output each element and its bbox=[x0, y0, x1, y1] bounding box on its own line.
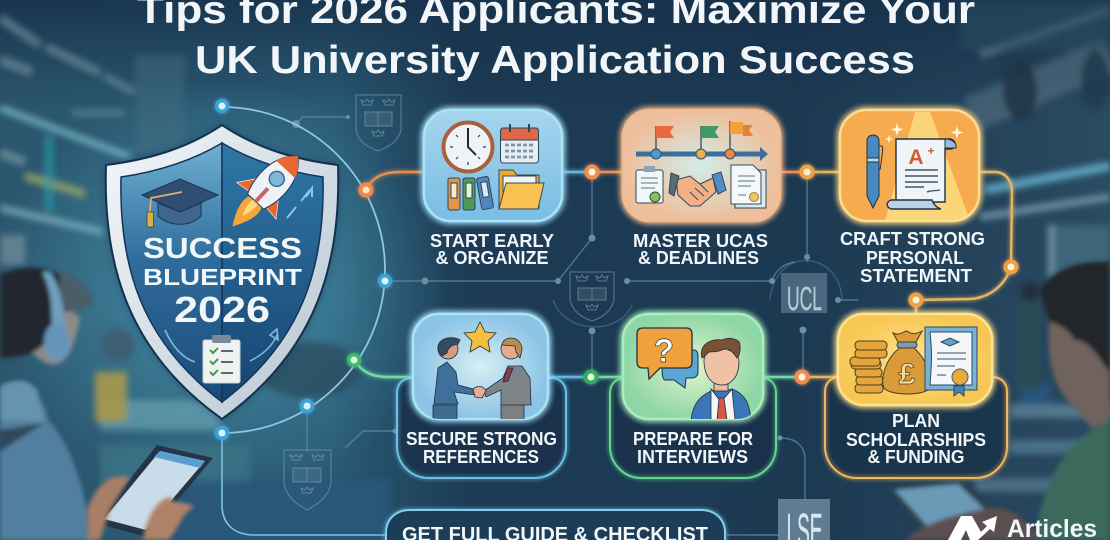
label bbox=[406, 429, 557, 467]
icon: handshake bbox=[669, 172, 726, 206]
label: SECURE STRONG bbox=[406, 429, 557, 449]
icon: graduation cap bbox=[142, 179, 218, 227]
icon: certificate document bbox=[731, 165, 766, 208]
node: orange bbox=[358, 182, 374, 198]
icon: pound money bag: £ bbox=[899, 358, 916, 391]
frame bbox=[397, 378, 566, 478]
panel: plan scholarships and funding bbox=[825, 314, 1007, 478]
icon: folder bbox=[499, 170, 544, 209]
label bbox=[633, 429, 753, 467]
label bbox=[840, 229, 985, 286]
icon: calendar bbox=[500, 124, 538, 163]
label: INTERVIEWS bbox=[637, 447, 748, 467]
card bbox=[623, 110, 780, 221]
icon: shield decorative arcs bbox=[165, 329, 278, 362]
logo: UCL: UCL bbox=[787, 280, 822, 317]
icon: scholarship certificate bbox=[925, 327, 977, 396]
card bbox=[838, 314, 992, 405]
icon: scroll with A+: A bbox=[908, 146, 924, 169]
panel: start early and organize bbox=[424, 110, 562, 268]
student left with tablet bbox=[0, 267, 213, 540]
icon: pound money bag bbox=[883, 331, 931, 394]
blueprint arc and node connector bbox=[222, 107, 385, 535]
icon: coin stack bbox=[850, 341, 887, 393]
card bbox=[413, 314, 548, 419]
crest: bottom bbox=[284, 450, 331, 510]
panel: master UCAS and deadlines bbox=[623, 110, 780, 268]
logo: LSE bbox=[778, 499, 830, 540]
frame bbox=[825, 377, 1007, 478]
icon: two men shaking hands under a star bbox=[433, 322, 531, 422]
icon: clipboard bbox=[636, 166, 663, 203]
panel: secure strong references bbox=[397, 314, 566, 478]
node: green bbox=[347, 353, 361, 367]
icon: clock bbox=[444, 122, 492, 172]
title: UK University Application Success bbox=[195, 39, 915, 82]
shield: Success Blueprint 2026 bbox=[106, 125, 338, 419]
label: STATEMENT bbox=[860, 266, 972, 286]
label: REFERENCES bbox=[423, 447, 539, 467]
icon: rocket bbox=[213, 138, 318, 245]
label bbox=[846, 411, 986, 467]
icon: interview candidate bbox=[691, 338, 751, 422]
label: PLAN bbox=[892, 411, 940, 431]
label: & ORGANIZE bbox=[436, 248, 548, 268]
node: blue lower bbox=[300, 399, 314, 413]
label: PREPARE FOR bbox=[633, 429, 753, 449]
label: START EARLY bbox=[430, 231, 554, 251]
icon: scroll with A+ bbox=[887, 139, 956, 209]
icon: binders bbox=[448, 176, 494, 210]
node: arc top bbox=[215, 99, 229, 113]
panel: prepare for interviews bbox=[610, 314, 776, 478]
shield: Success Blueprint 2026: BLUEPRINT bbox=[143, 264, 302, 290]
icon: blue speech bubble bbox=[662, 350, 698, 388]
call to action button bbox=[386, 510, 725, 540]
icon: clipboard checklist bbox=[203, 335, 240, 383]
card bbox=[623, 314, 763, 419]
label bbox=[633, 231, 768, 268]
node: bottom row orange bbox=[794, 370, 810, 384]
label: & FUNDING bbox=[868, 447, 964, 467]
logo: UCL bbox=[781, 273, 827, 317]
label: & DEADLINES bbox=[638, 248, 759, 268]
label: MASTER UCAS bbox=[633, 231, 768, 251]
connector: top row bbox=[366, 172, 1012, 313]
logo: Articles bbox=[948, 515, 1097, 540]
icon: rising arrow dashes bbox=[287, 188, 312, 218]
crest: top bbox=[356, 95, 401, 151]
crest: centre bbox=[570, 272, 614, 321]
node: above card 6 bbox=[908, 292, 924, 308]
icon: timeline with flags bbox=[636, 121, 768, 161]
connector: bottom row bbox=[354, 360, 838, 377]
shield title: SUCCESS bbox=[143, 233, 302, 265]
label: PERSONAL bbox=[866, 248, 964, 268]
panel: craft strong personal statement bbox=[840, 110, 985, 286]
node: right bbox=[1004, 260, 1018, 274]
node: top row 1 bbox=[584, 164, 600, 180]
background circuit lines bbox=[296, 117, 858, 535]
node: arc bottom bbox=[215, 426, 229, 440]
node: top row 2 bbox=[800, 164, 814, 180]
shield: Success Blueprint 2026: 2026 bbox=[174, 289, 270, 330]
label: CRAFT STRONG bbox=[840, 229, 985, 249]
icon: pen bbox=[867, 135, 883, 208]
icon: question bubble: ? bbox=[654, 332, 674, 369]
icon: spotlight bbox=[885, 112, 970, 221]
icon: scroll with A+: + bbox=[927, 144, 935, 158]
icon: sparkles bbox=[885, 123, 964, 143]
label bbox=[430, 231, 554, 268]
frame bbox=[610, 378, 776, 478]
card bbox=[424, 110, 562, 221]
node: bottom row green bbox=[584, 370, 598, 384]
title bbox=[137, 0, 975, 82]
card bbox=[840, 110, 979, 221]
node: blue mid bbox=[378, 274, 392, 288]
student right with tablet bbox=[887, 262, 1110, 540]
label: SCHOLARSHIPS bbox=[846, 430, 986, 450]
